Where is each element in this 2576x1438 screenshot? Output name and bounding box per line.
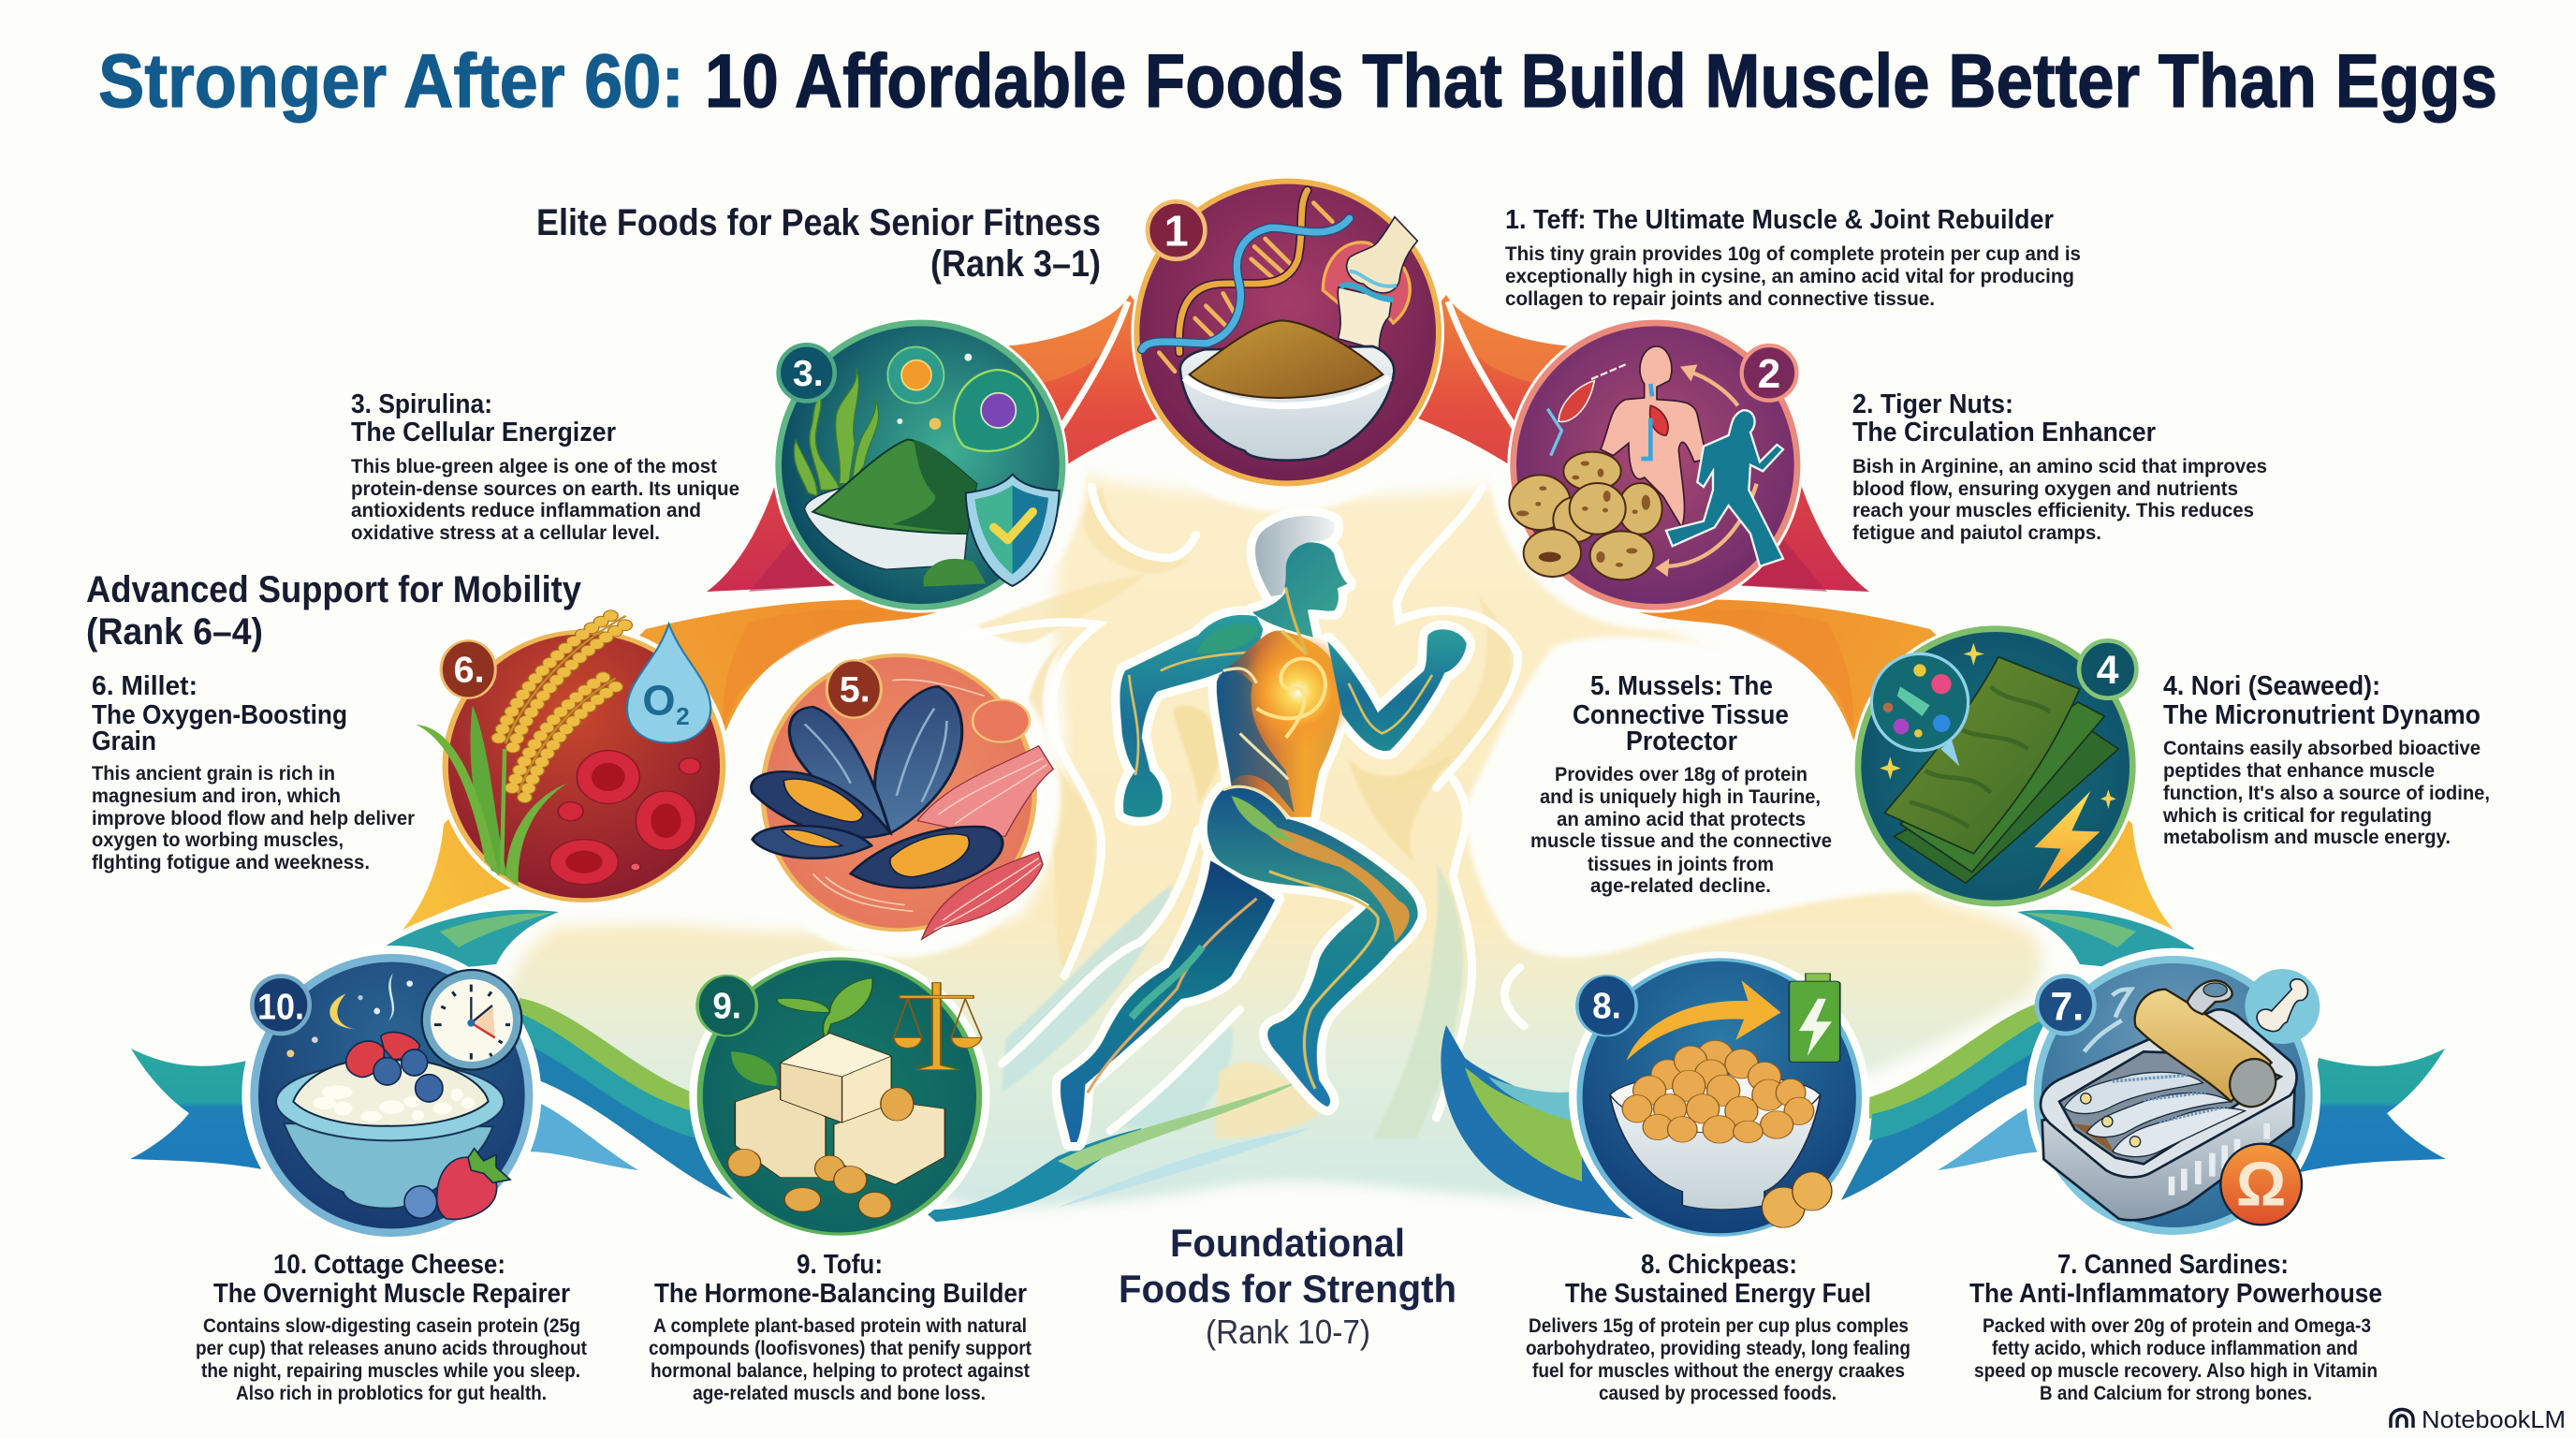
heading: advanced support (86, 569, 582, 653)
ribbon: left teal upper wave (382, 910, 559, 974)
text: item 6 Millet: 6. Millet: (92, 671, 198, 701)
icon: seaweed (794, 368, 879, 496)
text: item 9 Tofu: The Hormone-Balancing Builder (654, 1279, 1027, 1309)
text: item 6 Millet: improve blood flow and help deliver (92, 807, 416, 829)
text: item 9 Tofu: 9. Tofu: (797, 1250, 883, 1280)
heading: elite foods: (Rank 3–1) (930, 243, 1101, 285)
icon: soybeans (728, 1088, 914, 1218)
text: item 6 Millet (92, 671, 416, 873)
text: item 2 Tiger Nuts: Bish in Arginine, an amino scid that improves (1852, 455, 2267, 477)
text: item 3 Spirulina (351, 389, 739, 544)
icon: micronutrient bubble (1871, 653, 1969, 766)
icon: nori sheets (1884, 657, 2118, 883)
text: item 10 Cottage Cheese: The Overnight Muscle Repairer (213, 1279, 570, 1309)
text: item 2 Tiger Nuts: 2. Tiger Nuts: (1852, 389, 2013, 419)
icon: sardine tin (2041, 1009, 2297, 1220)
text: item 7 Canned Sardines: B and Calcium for strong bones. (2040, 1382, 2312, 1404)
wave between items 10 and 9 (520, 998, 735, 1200)
ribbon: top right red arc (1397, 295, 1869, 592)
text: item 9 Tofu (649, 1250, 1032, 1404)
text: item 8 Chickpeas: The Sustained Energy Fuel (1565, 1279, 1871, 1309)
text: item 8 Chickpeas: caused by processed foods. (1599, 1382, 1837, 1404)
icon: bowl of teff (1180, 320, 1394, 461)
text: item 7 Canned Sardines (1969, 1250, 2382, 1404)
wave from item 9 toward runner (922, 1077, 1310, 1222)
text: item 7 Canned Sardines: fetty acido, which roduce inflammation and (1992, 1337, 2358, 1359)
badge 10: 10. (257, 986, 304, 1027)
badge 1: 1 (1164, 207, 1189, 256)
text: item 2 Tiger Nuts: fetigue and paiutol cramps. (1852, 521, 2101, 544)
text: item 5 Mussels: 5. Mussels: The (1590, 671, 1773, 701)
badge 2: 2 (1758, 351, 1780, 397)
text: item 10 Cottage Cheese: the night, repairing muscles while you sleep. (201, 1359, 580, 1382)
icon: balance scales (894, 983, 982, 1070)
text: item 6 Millet: flghting fotigue and weekness. (92, 851, 370, 873)
text: item 4 Nori: The Micronutrient Dynamo (2163, 700, 2481, 730)
title: Stronger After 60: (98, 39, 684, 124)
icon: mussel shells (752, 686, 1003, 888)
ribbon tail right (2300, 1049, 2446, 1172)
text: item 5 Mussels: tissues in joints from (1588, 853, 1774, 875)
icon: sparkles (1880, 643, 2116, 809)
badge 5 (827, 660, 881, 718)
badge 5: 5. (840, 668, 871, 710)
text: item 5 Mussels: an amino acid that protects (1557, 808, 1806, 830)
icon: lightning bolt (2034, 791, 2100, 891)
text: item 3 Spirulina: This blue-green algee is one of the most (351, 455, 717, 477)
ribbon: left orange arc (402, 599, 955, 930)
text: item 2 Tiger Nuts: blood flow, ensuring oxygen and nutrients (1852, 477, 2238, 500)
icon: spirulina powder bowl (804, 439, 986, 587)
icon: oxygen drop: 2 (676, 702, 690, 730)
icon: berries (346, 1033, 510, 1219)
heading: advanced support: (Rank 6–4) (86, 611, 263, 653)
icon: sardines (2064, 1072, 2245, 1157)
text: item 1 Teff: This tiny grain provides 10g of complete protein per cup and is (1505, 242, 2081, 265)
wave between items 8 and 7 (1841, 998, 2056, 1200)
icon: small muscle badge (973, 699, 1030, 742)
badge 2 (1742, 345, 1796, 401)
text: item 4 Nori (2162, 671, 2490, 848)
icon: millet stalks (499, 611, 632, 798)
text: item 4 Nori: peptides that enhance muscle (2163, 759, 2435, 782)
icon: omega badge: Ω (2236, 1150, 2286, 1219)
heading: foundational foods: (Rank 10-7) (1206, 1313, 1370, 1351)
text: item 8 Chickpeas: oarbohydrateo, providing steady, long fealing (1526, 1337, 1910, 1359)
circle 1: Teff (1131, 176, 1444, 489)
icon: muscle fibres (917, 746, 1053, 939)
ribbon: right orange arc (1621, 599, 2174, 930)
text: item 8 Chickpeas (1526, 1250, 1910, 1404)
text: item 9 Tofu: A complete plant-based protein with natural (653, 1314, 1027, 1337)
ribbon tail left (130, 1049, 276, 1172)
text: item 5 Mussels (1530, 671, 1832, 897)
badge 4: 4 (2097, 648, 2119, 693)
text: item 1 Teff: exceptionally high in cysine, an amino acid vital for producing (1505, 265, 2074, 287)
icon: cells (887, 347, 1038, 451)
text: item 8 Chickpeas: Delivers 15g of protein per cup plus comples (1529, 1314, 1909, 1337)
icon: oxygen drop: O (642, 676, 676, 724)
text: item 3 Spirulina: 3. Spirulina: (351, 389, 492, 419)
white halos around central circles (739, 153, 1819, 958)
icon: clock (422, 970, 521, 1070)
text: item 5 Mussels: muscle tissue and the connective (1530, 829, 1832, 852)
badge 1 (1148, 201, 1205, 259)
text: item 6 Millet: magnesium and iron, which (92, 785, 341, 807)
text: item 2 Tiger Nuts: The Circulation Enhancer (1852, 418, 2156, 448)
icon: bowl of chickpeas (1610, 1040, 1821, 1210)
text: item 6 Millet: oxygen to worbing muscles, (92, 829, 344, 851)
text: item 10 Cottage Cheese: Contains slow-digesting casein protein (25g (203, 1314, 580, 1337)
text: item 10 Cottage Cheese (196, 1250, 587, 1404)
central cream swirl backdrop (505, 473, 2042, 1208)
text: item 4 Nori: which is critical for regulating (2162, 804, 2432, 827)
badge 3: 3. (793, 353, 824, 394)
ribbon: top left red arc (707, 295, 1179, 592)
badge 6: 6. (454, 650, 485, 691)
icon: tofu cubes (735, 1034, 944, 1184)
icon: knee joint (1323, 217, 1417, 350)
heading: advanced support: Advanced Support for Mobility (86, 569, 582, 610)
text: item 5 Mussels: Provides over 18g of protein (1555, 763, 1808, 785)
text: item 2 Tiger Nuts: reach your muscles efficienity. This reduces (1852, 499, 2254, 521)
text: item 4 Nori: Contains easily absorbed bioactive (2163, 737, 2481, 759)
circle 7: Canned Sardines (2026, 948, 2320, 1242)
text: item 2 Tiger Nuts (1852, 389, 2267, 544)
circle 5: Mussels (752, 649, 1053, 939)
icon: DNA helix (1142, 190, 1350, 372)
heading: foundational foods: Foods for Strength (1119, 1267, 1456, 1311)
badge 6 (441, 640, 495, 698)
icon: rolled lid (2135, 980, 2284, 1115)
text: item 9 Tofu: compounds (loofisvones) that penify support (649, 1337, 1032, 1359)
central runner figure (1061, 516, 1467, 1142)
text: item 9 Tofu: hormonal balance, helping to protect against (651, 1359, 1030, 1382)
badge 10 (252, 976, 310, 1034)
text: item 7 Canned Sardines: The Anti-Inflammatory Powerhouse (1969, 1279, 2382, 1309)
icon: red blood cells (549, 751, 700, 885)
text: item 1 Teff: 1. Teff: The Ultimate Muscle & Joint Rebuilder (1505, 205, 2054, 235)
icon: oxygen drop (627, 624, 710, 742)
heading: foundational foods (1119, 1221, 1456, 1351)
text: item 5 Mussels: age-related decline. (1590, 874, 1771, 897)
icon: circulation body (1601, 346, 1706, 527)
text: item 3 Spirulina: protein-dense sources on earth. Its unique (351, 477, 739, 500)
icon: teal runner (1666, 410, 1783, 566)
text: item 8 Chickpeas: fuel for muscles without the energy craakes (1532, 1359, 1905, 1382)
heading: foundational foods: Foundational (1170, 1221, 1405, 1265)
text: item 4 Nori: 4. Nori (Seaweed): (2163, 671, 2380, 701)
badge 8: 8. (1592, 986, 1621, 1027)
icon: bowl of cottage cheese (276, 1060, 504, 1209)
badge 7: 7. (2051, 984, 2084, 1029)
wave from runner toward item 8 (1441, 1025, 1633, 1219)
text: item 5 Mussels: and is uniquely high in Taurine, (1540, 785, 1821, 808)
circle 10: Cottage Cheese (242, 946, 541, 1245)
circle 3: Spirulina (772, 317, 1068, 613)
text: item 7 Canned Sardines: speed op muscle recovery. Also high in Vitamin (1974, 1359, 2378, 1382)
icon: bone badge (2245, 969, 2320, 1044)
text: item 4 Nori: metabolism and muscle energy. (2163, 826, 2451, 848)
text: item 6 Millet: Grain (92, 726, 156, 756)
badge 4 (2079, 640, 2136, 698)
circle 2: Tiger Nuts (1507, 317, 1803, 613)
badge 9: 9. (712, 986, 741, 1027)
text: item 5 Mussels: Protector (1626, 726, 1737, 756)
heading: elite foods (536, 202, 1101, 285)
text: item 10 Cottage Cheese: 10. Cottage Cheese: (273, 1250, 505, 1280)
text: item 7 Canned Sardines: 7. Canned Sardines: (2057, 1250, 2289, 1280)
icon: battery (1789, 974, 1840, 1062)
text: item 3 Spirulina: The Cellular Energizer (351, 418, 616, 448)
badge 7 (2037, 976, 2094, 1034)
icon: energy arrow (1627, 980, 1781, 1061)
icon: omega badge (2220, 1144, 2302, 1225)
icon: loose chickpeas (1762, 1172, 1832, 1227)
text: item 1 Teff (1505, 205, 2081, 310)
text: item 6 Millet: The Oxygen-Boosting (92, 700, 347, 730)
heading: elite foods: Elite Foods for Peak Senior Fitness (536, 202, 1101, 243)
badge 3 (779, 345, 835, 401)
badge 9 (697, 976, 756, 1035)
text: item 7 Canned Sardines: Packed with over 20g of protein and Omega-3 (1983, 1314, 2371, 1337)
icon: shield (966, 475, 1060, 586)
icon: tiger nuts (1509, 452, 1662, 580)
text: item 10 Cottage Cheese: Also rich in problotics for gut health. (236, 1382, 547, 1404)
text: item 10 Cottage Cheese: per cup) that releases anuno acids throughout (196, 1337, 587, 1359)
icon: muscle (1559, 381, 1594, 421)
text: item 5 Mussels: Connective Tissue (1573, 700, 1789, 730)
text: item 3 Spirulina: oxidative stress at a cellular level. (351, 521, 660, 544)
white clearing behind item 5 text (1467, 637, 1947, 957)
text: item 1 Teff: collagen to repair joints and connective tissue. (1505, 287, 1935, 310)
badge 8 (1577, 976, 1636, 1035)
icon: arrows (1666, 372, 1757, 566)
text: item 3 Spirulina: antioxidents reduce inflammation and (351, 499, 701, 521)
icon: moon and stars (286, 973, 413, 1057)
text: item 6 Millet: This ancient grain is rich in (92, 762, 335, 785)
ribbon: right teal upper wave (2017, 910, 2194, 974)
icon: sprout (731, 978, 872, 1086)
NotebookLM logo: NotebookLM (2422, 1405, 2566, 1433)
circle 6: Millet (416, 611, 730, 907)
text: item 9 Tofu: age-related muscls and bone loss. (693, 1382, 986, 1404)
circle 9: Tofu (689, 950, 990, 1242)
circle 8: Chickpeas (1569, 951, 1869, 1243)
text: item 8 Chickpeas: 8. Chickpeas: (1641, 1250, 1797, 1280)
text: item 4 Nori: function, It's also a source of iodine, (2163, 782, 2490, 804)
circle 4: Nori (1852, 623, 2139, 910)
